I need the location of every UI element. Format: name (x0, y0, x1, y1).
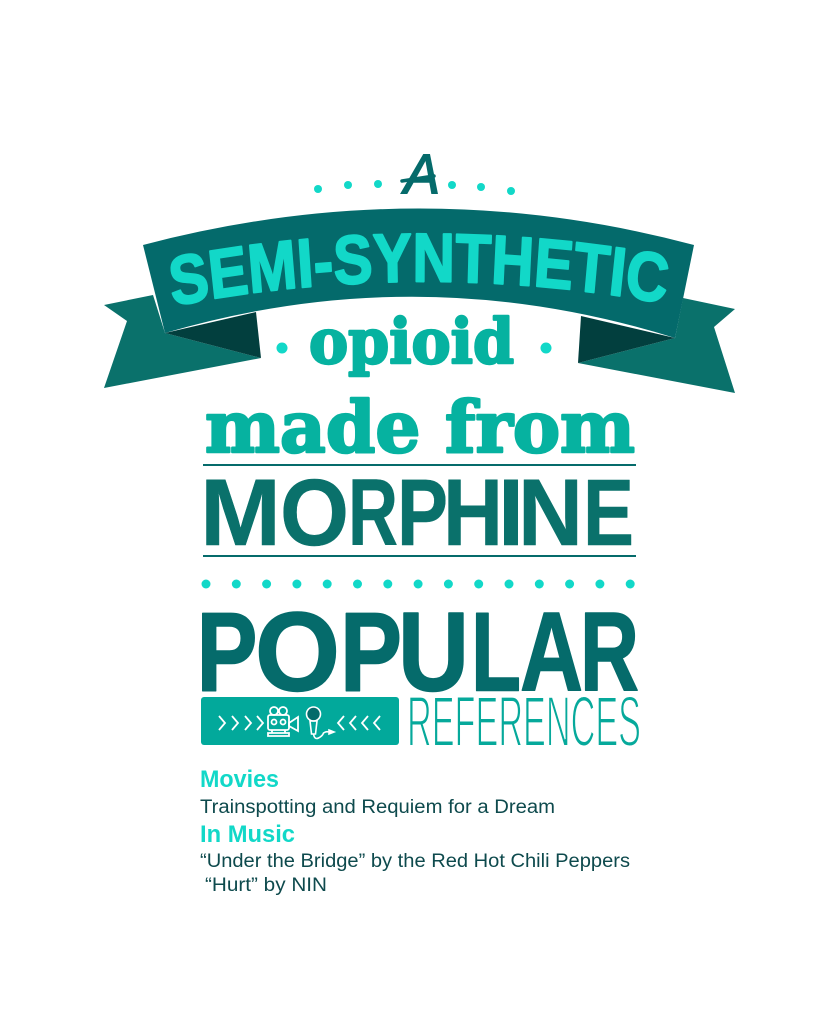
word: POPULAR: R (580, 590, 639, 714)
dotted divider (202, 580, 635, 588)
word: POPULAR: P (340, 590, 402, 714)
word: MORPHINE: N (518, 460, 583, 566)
icon: film camera (268, 707, 298, 736)
right chevrons (219, 716, 263, 730)
word: MORPHINE: E (583, 460, 634, 566)
word: opioid: opioid (309, 305, 514, 378)
words: made from: made from (205, 385, 635, 469)
left chevrons (338, 716, 380, 730)
icon strip (201, 697, 399, 745)
opioid side dots (276, 342, 552, 354)
word: POPULAR: A (520, 590, 583, 714)
word: MORPHINE: I (498, 460, 524, 566)
letter A heading: A (401, 142, 440, 205)
banner title: SEMI-SYNTHETIC (170, 232, 668, 305)
word: MORPHINE: P (397, 460, 448, 566)
word: POPULAR: U (398, 590, 469, 714)
top dotted arc (314, 180, 515, 195)
word: MORPHINE: R (348, 460, 398, 566)
word: MORPHINE: O (280, 460, 349, 566)
word: MORPHINE: M (200, 460, 281, 566)
icon: microphone (306, 707, 334, 738)
word: POPULAR: P (196, 590, 258, 714)
word: MORPHINE: H (443, 460, 503, 566)
word: POPULAR: L (471, 590, 521, 714)
heading: movies: Movies (200, 766, 279, 793)
morphine rule lines (203, 464, 636, 557)
heading: in music: In Music (200, 821, 295, 848)
word: POPULAR: O (255, 590, 340, 714)
ribbon banner (104, 208, 735, 393)
text: movie titles: Trainspotting and Requiem for a Dream (200, 797, 555, 818)
text: song two: “Hurt” by NIN (205, 875, 327, 896)
text: song one: “Under the Bridge” by the Red Hot Chili Peppers (200, 851, 630, 872)
